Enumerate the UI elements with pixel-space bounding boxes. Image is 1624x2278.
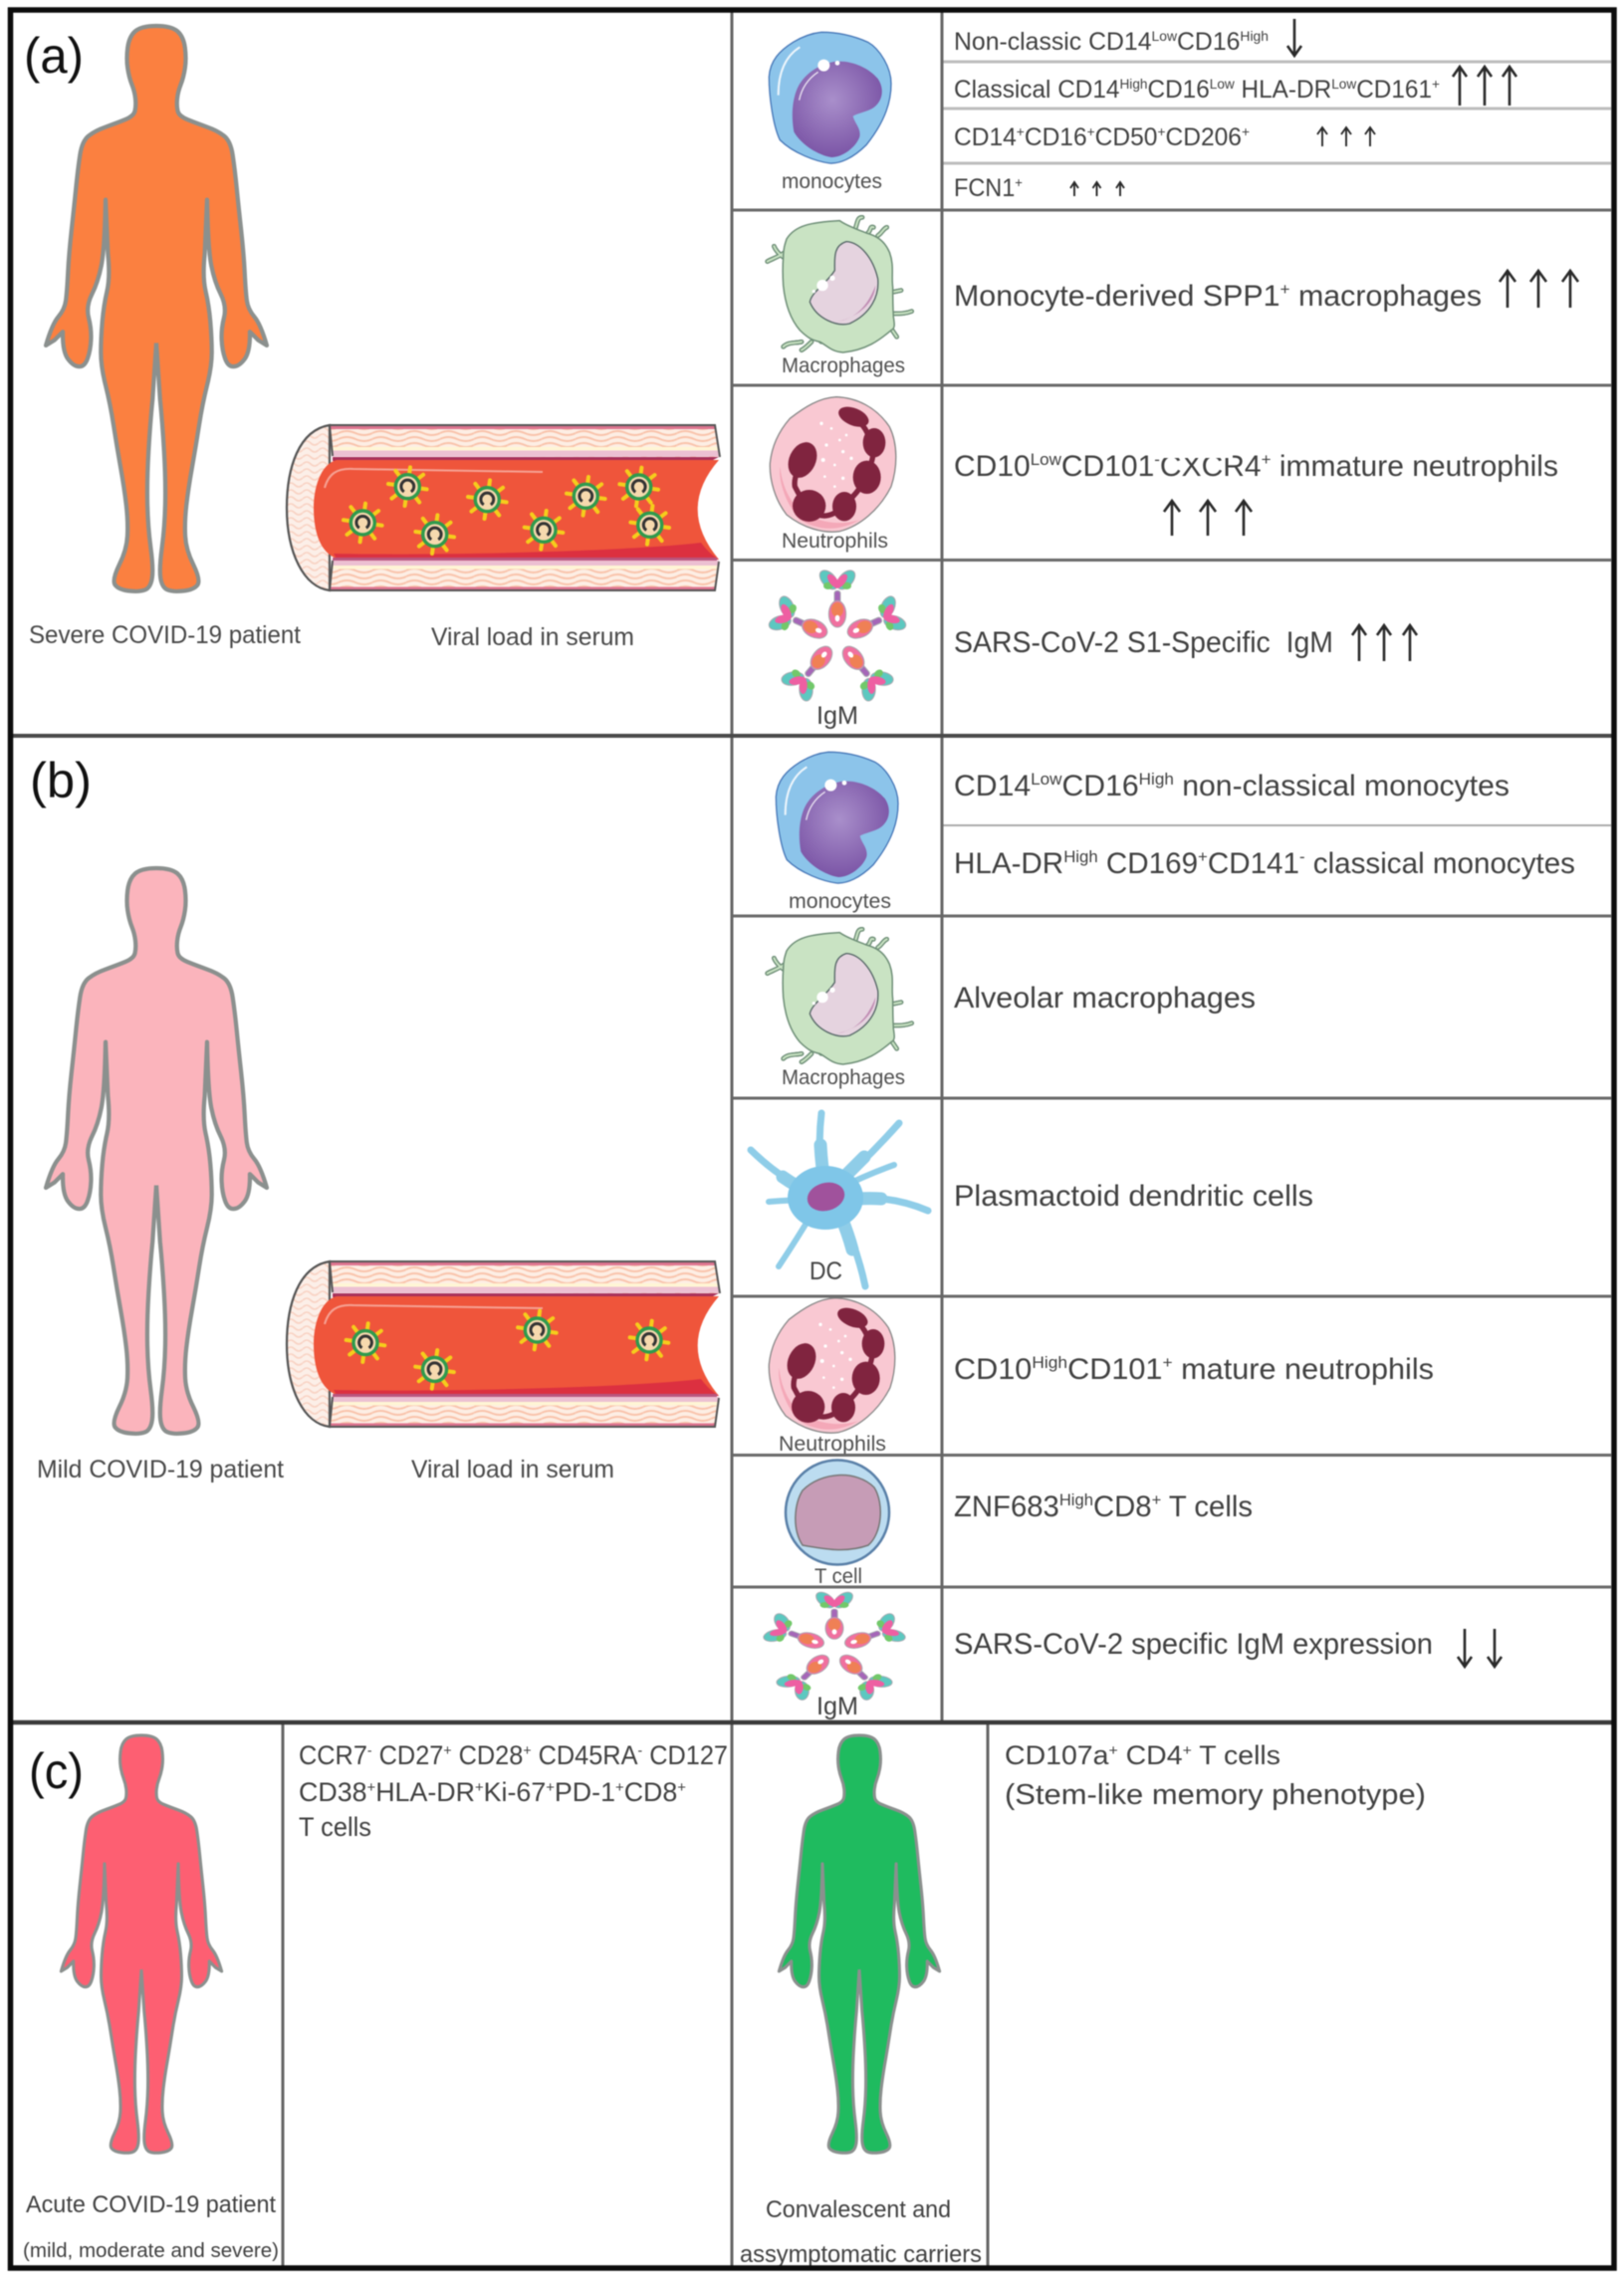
viral load caption: Viral load in serum <box>431 623 634 651</box>
text: classical monocytes: High <box>1119 76 1147 92</box>
icon: neutrophil <box>770 397 896 532</box>
text: mature neutrophils: CD10 <box>954 1353 1031 1386</box>
text: CD8+ T cells: CD8 <box>1093 1490 1152 1523</box>
text: immature neutrophils: CD101 <box>1061 450 1154 483</box>
text: FCN1+: + <box>1015 174 1023 190</box>
macrophages label: Macrophages <box>782 354 905 377</box>
text: non-classic monocytes: Low <box>1152 28 1178 44</box>
text: non-classical monocytes: non-classical monocytes <box>1174 770 1509 802</box>
T cell label: T cell <box>814 1565 862 1588</box>
text: classical monocytes: Classical CD14 <box>954 76 1124 104</box>
text: SPP1+ macrophages: macrophages <box>1290 280 1482 313</box>
text: SPP1+ macrophages: + <box>1279 280 1290 299</box>
text: classical monocytes: CD141 <box>1208 847 1299 880</box>
arrows: up x3 small <box>1070 182 1124 196</box>
viral load caption: Viral load in serum <box>411 1456 614 1483</box>
IgM label: IgM <box>816 702 858 730</box>
text: classical monocytes: HLA-DR <box>1235 76 1331 104</box>
arrows: down x2 <box>1458 1629 1502 1667</box>
icon: acute patient body <box>61 1735 222 2153</box>
arrows: up x3 <box>1500 271 1578 308</box>
text: CD8+ T cell phenotype: + <box>523 1742 532 1759</box>
panel: acute and convalescent (c) <box>23 1735 1426 2268</box>
panel label (b): (b) <box>30 753 92 808</box>
panel: mild COVID-19 (b) <box>30 752 1575 1720</box>
text: non-classical monocytes: CD16 <box>1062 770 1139 802</box>
text: CD14+CD16+CD50+CD206+: + <box>1242 123 1250 139</box>
text: non-classic monocytes: CD16 <box>1177 28 1240 56</box>
text: FCN1+: FCN1 <box>954 174 1019 202</box>
convalescent caption <box>740 2196 982 2268</box>
monocytes label: monocytes <box>782 170 882 193</box>
panel label (c): (c) <box>29 1743 84 1799</box>
text: CD8+ T cell phenotype: CCR7 <box>299 1740 372 1770</box>
text: CD8+ T cells: High <box>1059 1490 1093 1509</box>
severe patient caption: Severe COVID-19 patient <box>29 621 301 649</box>
text: immature neutrophils: Low <box>1031 450 1062 469</box>
text: specific IgM expression: SARS-CoV-2 specific IgM expression <box>954 1628 1433 1661</box>
text: immature neutrophils: immature neutrophils <box>1272 450 1558 483</box>
text: CD8+ T cells: + <box>1152 1490 1161 1509</box>
text: non-classic monocytes: Non-classic CD14 <box>954 28 1153 56</box>
text: non-classical monocytes: CD14 <box>954 770 1031 802</box>
convalescent caption: assymptomatic carriers <box>740 2241 982 2268</box>
text: CD8+ T cells: T cells <box>1161 1490 1253 1523</box>
text: classical monocytes: CD16 <box>1147 76 1210 104</box>
text: classical monocytes: CD169 <box>1098 847 1198 880</box>
IgM label: IgM <box>816 1693 858 1720</box>
text: S1-specific IgM: SARS-CoV-2 S1-Specific IgM <box>954 626 1333 659</box>
neutrophils label: Neutrophils <box>782 530 888 553</box>
acute severity caption: (mild, moderate and severe) <box>23 2240 279 2262</box>
text: CD8+ T cell phenotype: CD8 <box>624 1777 677 1807</box>
text: CD14+CD16+CD50+CD206+: + <box>1157 123 1166 139</box>
text: classical monocytes: classical monocytes <box>1305 847 1575 880</box>
text: CD4+ T cell phenotype: CD4 <box>1118 1740 1183 1770</box>
icon: neutrophil <box>769 1298 895 1433</box>
neutrophils label: Neutrophils <box>779 1433 886 1456</box>
text: CD8+ T cell phenotype: CD28 <box>452 1740 523 1770</box>
panel label (a): (a) <box>24 28 84 84</box>
text: CD8+ T cell phenotype: CD127 <box>642 1740 728 1770</box>
arrows: up x3 <box>1352 625 1417 661</box>
text: classical monocytes: HLA-DR <box>954 847 1065 880</box>
icon: dendritic cell <box>751 1113 928 1286</box>
text: plasmacytoid dendritic cells: Plasmactoid dendritic cells <box>954 1180 1313 1213</box>
text: CD8+ T cells: ZNF683 <box>954 1490 1061 1523</box>
icon: blood vessel with high viral load <box>287 425 720 590</box>
text: non-classical monocytes: Low <box>1031 770 1062 789</box>
icon: monocyte <box>769 32 891 163</box>
DC label: DC <box>810 1257 842 1285</box>
text: CD4+ T cell phenotype: + <box>1108 1742 1118 1759</box>
text: classical monocytes: High <box>1063 847 1098 866</box>
text: classical monocytes: Low <box>1331 76 1357 92</box>
text: CD8+ T cell phenotype: + <box>367 1779 375 1796</box>
text: CD4+ T cell phenotype: (Stem-like memory phenotype) <box>1005 1779 1426 1811</box>
text: CD8+ T cell phenotype: T cells <box>299 1812 371 1842</box>
text: CD14+CD16+CD50+CD206+: + <box>1087 123 1095 139</box>
text: non-classical monocytes: High <box>1139 770 1174 789</box>
icon: convalescent patient body <box>779 1735 940 2153</box>
text: CD8+ T cell phenotype: + <box>677 1779 686 1796</box>
mild patient caption: Mild COVID-19 patient <box>37 1456 284 1483</box>
arrows: up x3 <box>1453 67 1516 106</box>
text: classical monocytes: Low <box>1210 76 1236 92</box>
text: classical monocytes: + <box>1432 76 1440 92</box>
panel: severe COVID-19 (a) <box>24 19 1578 730</box>
text: mature neutrophils: CD101 <box>1067 1353 1162 1386</box>
icon: severe patient body <box>46 26 267 591</box>
acute patient caption: Acute COVID-19 patient <box>26 2191 276 2218</box>
text: CD8+ T cell phenotype: CD38 <box>299 1777 367 1807</box>
icon: IgM antibodies <box>763 567 912 708</box>
text: non-classic monocytes: High <box>1240 28 1269 44</box>
text: immature neutrophils: CXCR4 <box>1160 450 1262 483</box>
arrows: up x3 small <box>1317 127 1375 146</box>
text: immature neutrophils: CD10 <box>954 450 1031 483</box>
monocytes label: monocytes <box>789 890 891 913</box>
text: alveolar macrophages: Alveolar macrophages <box>954 982 1256 1015</box>
text: CD14+CD16+CD50+CD206+: CD206 <box>1166 123 1242 151</box>
text: CD8+ T cell phenotype: + <box>475 1779 484 1796</box>
text: CD8+ T cell phenotype: CD27 <box>372 1740 443 1770</box>
text: CD14+CD16+CD50+CD206+: + <box>1017 123 1025 139</box>
text: CD4+ T cell phenotype: CD107a <box>1005 1740 1103 1770</box>
macrophages label: Macrophages <box>782 1066 905 1089</box>
text: mature neutrophils: mature neutrophils <box>1173 1353 1434 1386</box>
icon: macrophage <box>768 217 912 352</box>
text: CD8+ T cell phenotype: CD45RA <box>532 1740 637 1770</box>
text: mature neutrophils: High <box>1032 1353 1067 1372</box>
arrow: down <box>1287 19 1301 56</box>
icon: macrophage <box>768 929 912 1064</box>
icon: mild patient body <box>46 868 267 1434</box>
text: CD8+ T cell phenotype: + <box>546 1779 555 1796</box>
text: immature neutrophils: - <box>1154 450 1160 469</box>
icon: T cell <box>786 1460 889 1565</box>
text: immature neutrophils: + <box>1262 450 1272 469</box>
text: CD4+ T cell phenotype <box>1005 1740 1426 1811</box>
text: CD14+CD16+CD50+CD206+: CD16 <box>1025 123 1087 151</box>
convalescent caption: Convalescent and <box>766 2196 951 2223</box>
text: classical monocytes: + <box>1198 847 1208 866</box>
text: classical monocytes: CD161 <box>1356 76 1432 104</box>
text: CD8+ T cell phenotype: HLA-DR <box>375 1777 475 1807</box>
text: CD8+ T cell phenotype: Ki-67 <box>484 1777 546 1807</box>
arrows: up x3 <box>1164 501 1252 536</box>
text: CD4+ T cell phenotype: T cells <box>1192 1740 1280 1770</box>
text: classical monocytes: - <box>1299 847 1305 866</box>
text: SPP1+ macrophages: Monocyte-derived SPP1 <box>954 280 1276 313</box>
text: CD4+ T cell phenotype: + <box>1183 1742 1192 1759</box>
icon: IgM antibodies <box>758 1589 911 1706</box>
text: CD8+ T cell phenotype: + <box>443 1742 452 1759</box>
text: CD8+ T cell phenotype: - <box>637 1742 642 1759</box>
text: CD14+CD16+CD50+CD206+: CD14 <box>954 123 1018 151</box>
text: CD8+ T cell phenotype: - <box>367 1742 372 1759</box>
text: CD8+ T cell phenotype <box>299 1740 728 1842</box>
text: mature neutrophils: + <box>1162 1353 1173 1372</box>
icon: blood vessel with low viral load <box>287 1261 720 1427</box>
text: CD14+CD16+CD50+CD206+: CD50 <box>1095 123 1157 151</box>
text: CD8+ T cell phenotype: + <box>615 1779 624 1796</box>
icon: monocyte <box>776 752 898 883</box>
text: CD8+ T cell phenotype: PD-1 <box>555 1777 615 1807</box>
